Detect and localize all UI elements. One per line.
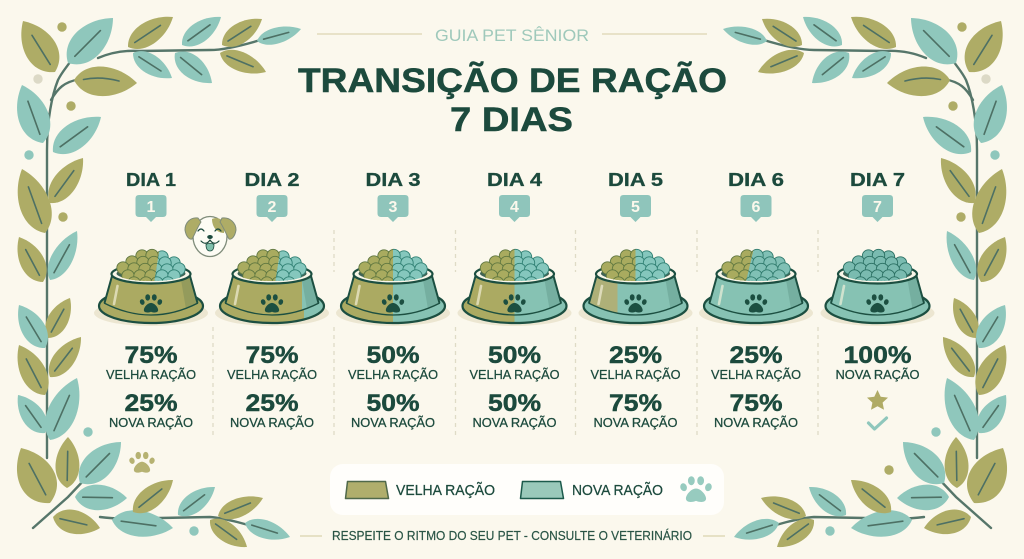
badge: 1: 1 (147, 199, 156, 216)
bowl: day 4 (454, 249, 574, 330)
eyebrow: guia pet sênior: GUIA PET SÊNIOR (435, 26, 589, 45)
badge: 6: 6 (752, 199, 761, 216)
new food share: NOVA RAÇÃO (109, 416, 193, 430)
new food share: NOVA RAÇÃO (714, 416, 798, 430)
old food share (711, 342, 801, 382)
heading: dia 2: DIA 2 (244, 169, 300, 190)
new food share: 25% (124, 390, 178, 417)
badge: 3: 3 (389, 199, 398, 216)
bowl: day 6 (696, 249, 816, 330)
new food share: 50% (366, 390, 420, 417)
new food share: 100% (844, 342, 912, 369)
column: dia 1 (91, 169, 211, 430)
icon: small olive paw (128, 452, 156, 473)
badge: 1 (136, 195, 166, 222)
new food share (351, 390, 435, 430)
legend label: new food: NOVA RAÇÃO (572, 482, 663, 499)
old food share: 75% (124, 342, 178, 369)
bowl: day 1 (91, 249, 211, 330)
new food share: NOVA RAÇÃO (472, 416, 557, 430)
new food share: 75% (730, 390, 782, 417)
old food share: 75% (246, 342, 298, 369)
new food share (109, 390, 193, 430)
heading: dia 1: DIA 1 (126, 169, 176, 190)
heading: dia 6: DIA 6 (728, 169, 784, 190)
old food share (470, 342, 560, 382)
old food share (590, 342, 681, 382)
new food share (594, 390, 678, 430)
badge: 2: 2 (268, 199, 277, 216)
old food share: 50% (366, 342, 420, 369)
badge: 4: 4 (510, 199, 519, 216)
column: dia 5 (576, 169, 696, 430)
heading: dia 4: DIA 4 (487, 169, 543, 190)
new food share (230, 390, 314, 430)
old food share: VELHA RAÇÃO (106, 368, 196, 382)
foliage: left border (5, 7, 303, 555)
new food share: NOVA RAÇÃO (351, 416, 435, 430)
badge: 5 (620, 195, 651, 222)
old food share: VELHA RAÇÃO (470, 368, 560, 382)
old food share: 25% (609, 342, 662, 369)
new food share: NOVA RAÇÃO (230, 416, 314, 430)
column: dia 3 (333, 169, 453, 430)
new food share (472, 390, 557, 430)
bowl: day 2 (212, 249, 332, 330)
new food share: 25% (246, 390, 298, 417)
decorative dot: bottom right (884, 465, 894, 475)
icon: star (867, 390, 888, 410)
column: dia 7 (818, 169, 938, 429)
new food share: 75% (609, 390, 662, 417)
old food share: VELHA RAÇÃO (590, 368, 681, 382)
footer note: RESPEITE O RITMO DO SEU PET - CONSULTE O VETERINÁRIO (332, 528, 692, 543)
bowl: day 3 (333, 249, 453, 330)
legend swatch: new food (520, 482, 564, 498)
heading: dia 7: DIA 7 (850, 169, 905, 190)
legend (330, 464, 724, 515)
bowl: day 5 (576, 249, 696, 330)
badge: 5: 5 (631, 199, 640, 216)
old food share: 25% (730, 342, 782, 369)
badge: 6 (740, 195, 772, 222)
badge: 7: 7 (873, 199, 882, 216)
heading: dia 5: DIA 5 (608, 169, 663, 190)
column: dia 4 (454, 169, 574, 430)
new food share (714, 390, 798, 430)
legend label: old food: VELHA RAÇÃO (396, 482, 495, 499)
bowl: day 7 (818, 249, 938, 330)
badge: 7 (862, 195, 893, 222)
old food share: 50% (488, 342, 541, 369)
heading: dia 3: DIA 3 (366, 169, 420, 190)
badge: 4 (499, 195, 530, 222)
old food share: VELHA RAÇÃO (711, 368, 801, 382)
badge: 3 (378, 195, 408, 222)
title: 7 DIAS (450, 101, 573, 139)
old food share (348, 342, 438, 382)
title (298, 61, 727, 139)
new food share: 50% (488, 390, 541, 417)
column: dia 2 (212, 169, 332, 430)
icon: happy dog (185, 216, 236, 256)
icon: check (868, 418, 886, 429)
icon: teal paw (679, 476, 713, 502)
title: TRANSIÇÃO DE RAÇÃO (298, 61, 727, 100)
column: dia 6 (696, 169, 816, 430)
new food share: NOVA RAÇÃO (836, 368, 920, 382)
badge: 2 (256, 195, 288, 222)
dashed column separators (213, 230, 818, 435)
legend swatch: old food (346, 482, 388, 498)
foliage: right border (721, 7, 1019, 555)
new food share (836, 342, 920, 382)
old food share: VELHA RAÇÃO (227, 368, 317, 382)
old food share: VELHA RAÇÃO (348, 368, 438, 382)
old food share (227, 342, 317, 382)
old food share (106, 342, 196, 382)
new food share: NOVA RAÇÃO (594, 416, 678, 430)
